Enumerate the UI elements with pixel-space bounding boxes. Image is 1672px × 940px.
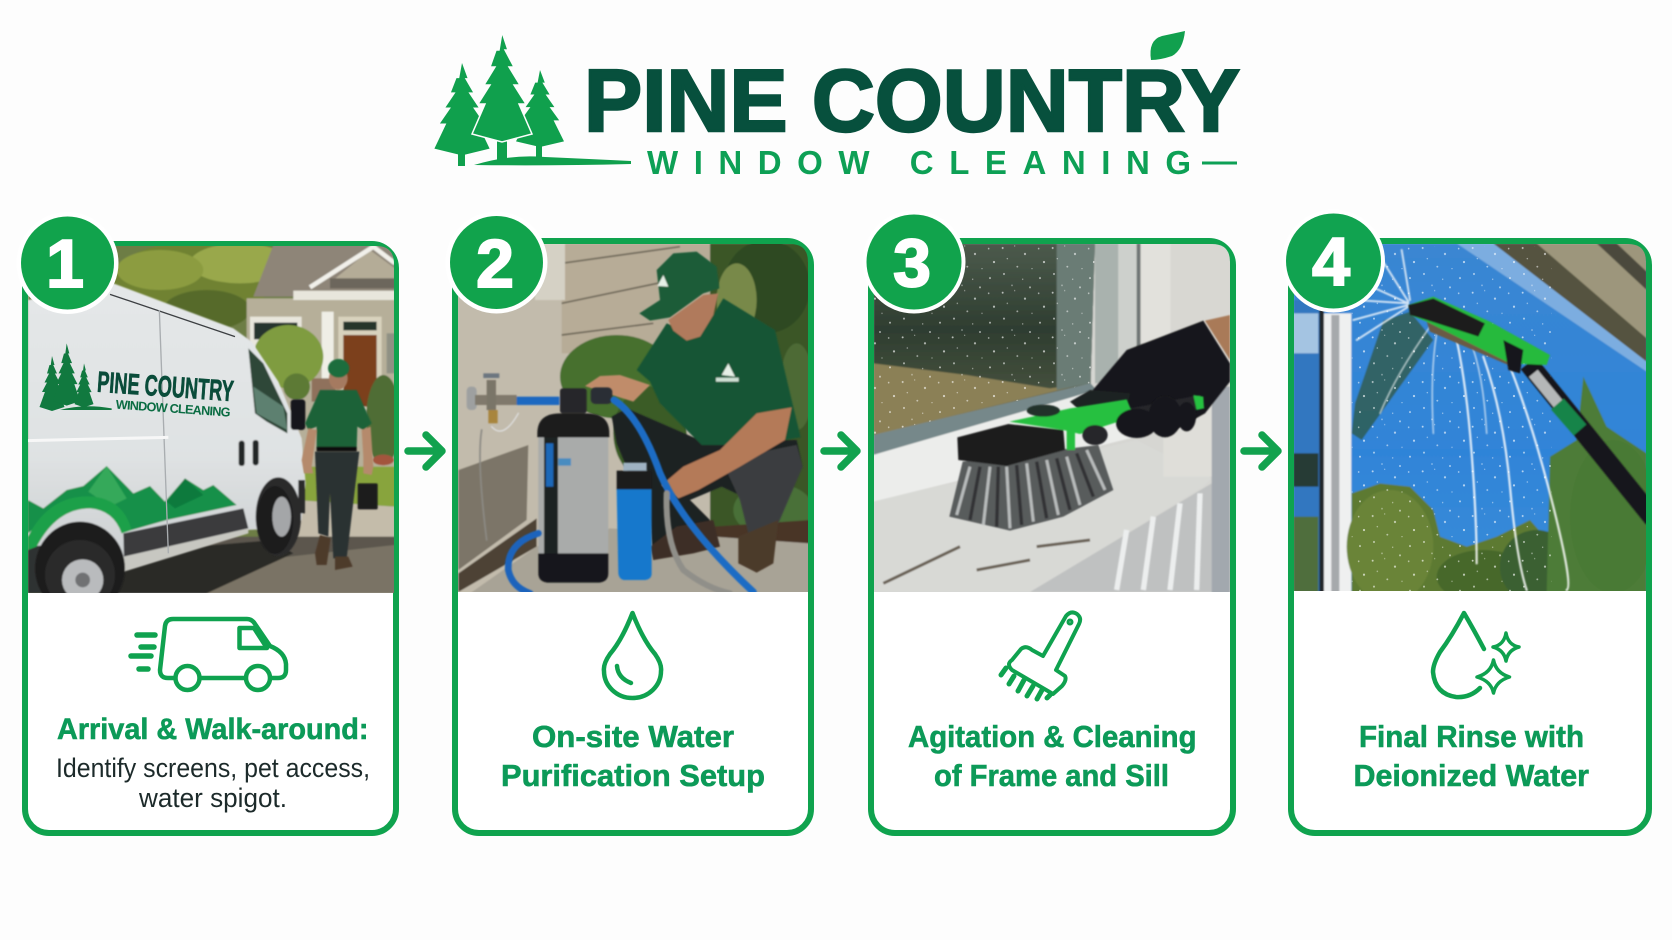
icon: moving van bbox=[131, 619, 286, 690]
card 4 frame bbox=[1291, 241, 1649, 833]
step 4 number badge bbox=[1282, 210, 1385, 312]
arrow: step 3 to 4 bbox=[1244, 435, 1278, 467]
step 3 number badge: 3 bbox=[893, 225, 931, 301]
step 1 number badge: 1 bbox=[46, 226, 84, 302]
step 1 description bbox=[56, 753, 370, 813]
step 2 heading bbox=[501, 719, 765, 793]
icon: pine trees bbox=[434, 32, 631, 166]
van decal lines bbox=[28, 294, 235, 553]
card 3 frame bbox=[871, 241, 1233, 833]
step 2 number badge: 2 bbox=[476, 226, 514, 302]
photo: technician connecting purification tank bbox=[457, 240, 813, 593]
technician bbox=[585, 252, 803, 573]
step 4 heading: Deionized Water bbox=[1354, 758, 1589, 793]
icon: water drop bbox=[604, 613, 661, 698]
van decal: brand text: PINE COUNTRY bbox=[96, 366, 235, 408]
step 2 heading: Purification Setup bbox=[501, 758, 765, 793]
panel: step 3 agitation bbox=[862, 210, 1233, 833]
card 1 frame bbox=[25, 244, 396, 833]
step 4 heading: Final Rinse with bbox=[1359, 719, 1584, 754]
tagline dash bbox=[1202, 162, 1237, 164]
card 2 frame bbox=[455, 241, 811, 833]
icon: leaf bbox=[1150, 31, 1185, 60]
arrow: step 2 to 3 bbox=[824, 435, 857, 467]
scrub brush bbox=[949, 395, 1205, 531]
brand tagline: WINDOW CLEANING bbox=[647, 144, 1191, 181]
step 3 heading: of Frame and Sill bbox=[934, 758, 1169, 793]
photo: van and technician at house bbox=[28, 243, 401, 615]
step 3 heading bbox=[908, 719, 1196, 793]
step 3 number badge bbox=[862, 210, 966, 314]
step 1 heading: Arrival & Walk-around: bbox=[57, 713, 368, 746]
step 1 description: water spigot. bbox=[138, 783, 287, 813]
water spray and streams bbox=[1353, 250, 1568, 590]
icon: scrub brush bbox=[1001, 612, 1080, 699]
step 4 number badge: 4 bbox=[1312, 224, 1350, 300]
squeegee head and pole bbox=[1408, 297, 1653, 518]
brand name: PINE COUNTRY bbox=[584, 51, 1240, 150]
panel: step 2 water purification bbox=[446, 212, 813, 833]
panel: step 1 arrival bbox=[16, 212, 401, 833]
van decal: trees bbox=[39, 343, 112, 411]
purification tank and filter bbox=[467, 373, 652, 583]
panel: step 4 final rinse bbox=[1282, 210, 1657, 833]
water droplets on glass bbox=[873, 243, 1095, 435]
step 4 heading bbox=[1354, 719, 1589, 793]
icon: drop with sparkles bbox=[1433, 613, 1519, 697]
gloved hand back and forearm bbox=[1070, 315, 1230, 430]
arrow: step 1 to 2 bbox=[408, 435, 442, 467]
photo: gloved hand scrubbing window sill bbox=[873, 243, 1232, 593]
water droplets on glass bbox=[1352, 247, 1552, 593]
step 2 heading: On-site Water bbox=[532, 719, 734, 754]
technician walking bbox=[302, 359, 378, 570]
van body bbox=[28, 283, 306, 615]
step 3 heading: Agitation & Cleaning bbox=[908, 719, 1196, 754]
hoses bbox=[480, 400, 753, 593]
van decal: brand text bbox=[98, 371, 234, 416]
step 1 number badge bbox=[16, 212, 118, 314]
step 1 description: Identify screens, pet access, bbox=[56, 753, 370, 783]
logo: Pine Country Window Cleaning bbox=[434, 31, 1240, 181]
van decal: brand text: WINDOW CLEANING bbox=[115, 398, 231, 420]
photo: water-fed pole rinsing window bbox=[1293, 243, 1657, 603]
step 2 number badge bbox=[446, 212, 548, 314]
